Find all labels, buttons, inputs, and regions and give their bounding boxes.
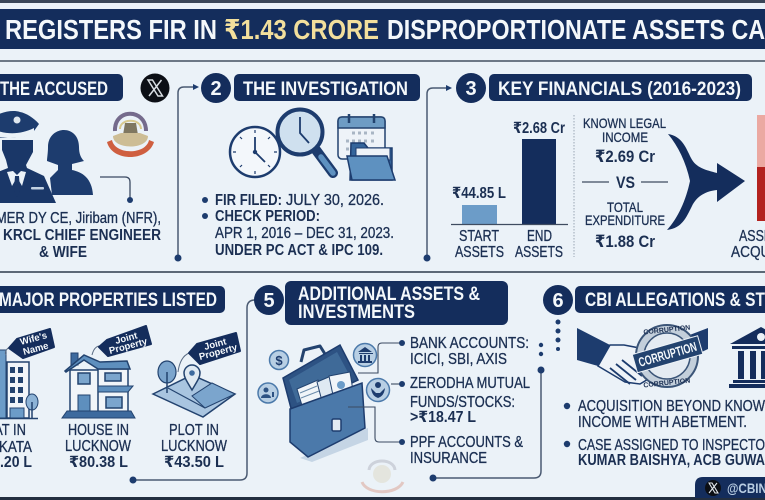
comparison: income versus expenditure: TOTAL — [607, 199, 643, 215]
text: property labels: ₹80.38 L — [69, 454, 128, 471]
footer tag: X handle — [695, 477, 765, 498]
number badge 5: 5 — [263, 290, 275, 312]
panel: additional assets — [254, 281, 530, 467]
bar chart: start and end assets: ASSETS — [515, 244, 563, 261]
text: investigation details: UNDER PC ACT & IPC 109. — [215, 242, 383, 259]
bar chart: start and end assets: ₹44.85 L — [452, 185, 506, 202]
bar chart: start and end assets: ₹2.68 Cr — [513, 120, 565, 137]
tag: joint property house — [92, 326, 151, 357]
comparison: income versus expenditure: INCOME — [602, 129, 648, 145]
arrow: merging arrow — [667, 134, 745, 230]
tag: joint property house: Joint — [114, 330, 140, 347]
heading: additional assets: INVESTMENTS — [298, 301, 415, 323]
icon: bank circle — [354, 344, 376, 366]
bar chart: start and end assets: START — [459, 228, 499, 245]
number badge 2: 2 — [210, 78, 222, 100]
connector: accused label line — [100, 177, 130, 199]
text: investigation details — [202, 192, 394, 259]
arrow: properties to additional assets — [130, 300, 255, 484]
icon: folder — [347, 143, 395, 180]
number badge 6 — [543, 285, 573, 351]
text: property labels — [0, 422, 227, 471]
panel: CBI allegations — [543, 285, 765, 498]
title banner: REGISTERS FIR IN — [5, 14, 217, 45]
icon: dollar circle: $ — [275, 353, 283, 368]
number badge 3 — [456, 73, 486, 103]
icon: dollar circle — [270, 350, 288, 370]
arrow: additional assets to allegations — [430, 343, 544, 482]
text: property labels: .20 L — [0, 454, 32, 471]
panel: key financials — [451, 73, 765, 261]
text: additional assets list: ZERODHA MUTUAL — [410, 375, 530, 392]
comparison: income versus expenditure: ₹2.69 Cr — [595, 147, 655, 166]
bar chart: start and end assets: ASSETS — [455, 244, 504, 261]
text: property labels: LUCKNOW — [65, 438, 131, 455]
text: additional assets list: INSURANCE — [410, 450, 487, 467]
icon: handshake with corruption stamp: CORRUPTION — [637, 339, 698, 370]
text: accused description: & WIFE — [39, 244, 87, 261]
icon: handshake with corruption stamp: CORRUPTION — [643, 325, 691, 336]
heading: major properties: MAJOR PROPERTIES LISTED — [0, 289, 217, 311]
tag: wife's name — [5, 329, 54, 358]
text: additional assets list — [399, 335, 530, 467]
text: property labels: HOUSE IN — [68, 422, 129, 439]
text: investigation details: JULY 30, 2026. — [286, 192, 384, 209]
icon: handshake with corruption stamp: CORRUPTION — [643, 378, 691, 389]
text: accused description — [0, 210, 161, 261]
connectors: briefcase to list — [348, 343, 402, 442]
icon: X logo — [140, 74, 170, 102]
panel: the accused — [0, 74, 170, 261]
bar chart: start and end assets — [451, 120, 568, 261]
number badge 3: 3 — [465, 78, 477, 100]
icon: person chart circle — [258, 383, 278, 403]
text: additional assets list: PPF ACCOUNTS & — [410, 434, 524, 451]
comparison: income versus expenditure: ₹1.88 Cr — [595, 232, 655, 251]
icon: plot with pin — [153, 361, 235, 417]
text: property labels: PLOT IN — [169, 422, 219, 439]
arrow: investigation to financials — [424, 85, 452, 262]
heading: the investigation: THE INVESTIGATION — [243, 78, 408, 100]
text: additional assets list: FUNDS/STOCKS: — [410, 394, 515, 411]
heading: the accused: THE ACCUSED — [0, 78, 108, 100]
icon: magnifying glass — [278, 110, 333, 173]
title banner — [0, 9, 765, 49]
heading: additional assets — [285, 281, 508, 325]
heading: major properties — [0, 286, 225, 313]
text: allegations list — [564, 398, 765, 469]
panel: the investigation — [201, 73, 420, 259]
text: investigation details: APR 1, 2016 – DEC 31, 2023. — [215, 225, 394, 242]
text: additional assets list: >₹18.47 L — [410, 409, 476, 426]
text: property labels: LUCKNOW — [161, 438, 227, 455]
icon: courthouse — [729, 327, 765, 388]
number badge 2 — [201, 73, 231, 103]
text: accused description: KRCL CHIEF ENGINEER — [3, 227, 161, 244]
title banner: ₹1.43 CRORE — [224, 14, 379, 45]
chart: assets acquired stack — [731, 115, 765, 261]
icon: handshake with corruption stamp — [577, 325, 708, 389]
panel: major properties — [0, 286, 240, 471]
icon: officer and wife silhouettes — [0, 111, 93, 203]
text: investigation details: CHECK PERIOD: — [215, 208, 320, 225]
text: investigation details: FIR FILED: — [215, 192, 282, 209]
tag: wife's name: Name — [22, 341, 50, 358]
comparison: income versus expenditure: KNOWN LEGAL — [583, 115, 666, 131]
icon: savings hand circle — [366, 378, 390, 402]
number badge 6: 6 — [552, 290, 564, 312]
bar chart: start and end assets: END — [527, 228, 552, 245]
comparison: income versus expenditure: VS — [616, 173, 635, 192]
tag: joint property plot: Joint — [203, 336, 229, 353]
number badge 5 — [254, 285, 284, 315]
tag: joint property plot — [178, 333, 240, 372]
icon: flat building — [0, 350, 38, 418]
icon: clock — [230, 127, 280, 177]
text: property labels: ₹43.50 L — [164, 454, 224, 471]
comparison: income versus expenditure: EXPENDITURE — [585, 212, 665, 228]
tag: joint property plot: Property — [198, 342, 239, 363]
icon: calendar — [338, 114, 385, 159]
text: additional assets list: ICICI, SBI, AXIS — [410, 351, 507, 368]
heading: key financials: KEY FINANCIALS (2016-2023) — [498, 78, 741, 100]
text: additional assets list: BANK ACCOUNTS: — [410, 335, 529, 352]
arrow: accused to investigation — [174, 84, 199, 262]
watermark: faded emblem — [362, 461, 403, 492]
heading: additional assets: ADDITIONAL ASSETS & — [298, 283, 480, 305]
icon: CBI emblem — [107, 114, 154, 157]
icon: house — [62, 353, 135, 418]
tag: joint property house: Property — [108, 336, 149, 357]
tag: wife's name: Wife's — [19, 330, 48, 348]
comparison: income versus expenditure — [582, 115, 668, 251]
icon: briefcase with documents — [283, 345, 368, 462]
